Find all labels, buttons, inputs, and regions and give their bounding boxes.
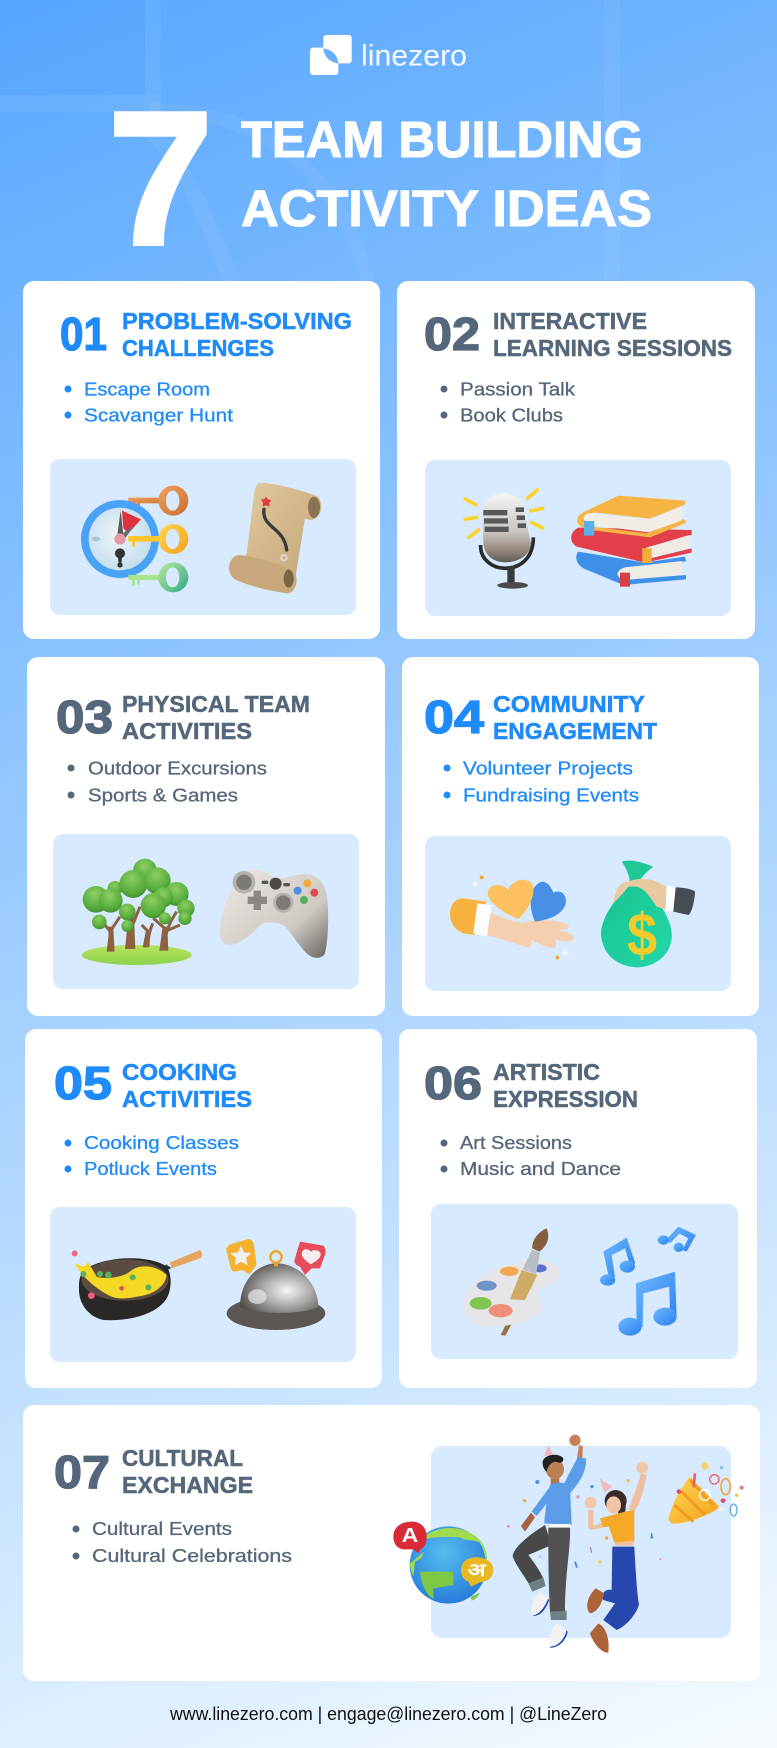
image panel 07 xyxy=(431,1446,731,1638)
image panel 05 xyxy=(50,1207,356,1362)
panel: card 07 cultural exchange xyxy=(23,1405,760,1681)
image panel 06 xyxy=(431,1204,738,1359)
heading 06: EXPRESSION xyxy=(493,1086,638,1112)
list 03: Outdoor Excursions xyxy=(88,758,267,778)
number 03: 03 xyxy=(56,691,113,743)
list 04 xyxy=(444,758,639,806)
list 04: Fundraising Events xyxy=(463,784,639,806)
icon: serving cloche xyxy=(226,1239,326,1330)
heading 01: CHALLENGES xyxy=(122,335,274,361)
title line 1: TEAM BUILDING xyxy=(241,111,643,168)
number 05: 05 xyxy=(54,1057,112,1109)
icon: microphone xyxy=(465,490,543,589)
heading 02 xyxy=(493,308,732,361)
panel: card 05 cooking activities xyxy=(25,1029,382,1388)
heading 05: ACTIVITIES xyxy=(122,1086,252,1112)
heading 05: COOKING xyxy=(122,1059,237,1085)
icon: clock with keys xyxy=(81,486,188,592)
heading 04: ENGAGEMENT xyxy=(493,718,658,744)
list 03 xyxy=(68,758,267,806)
list 04: Volunteer Projects xyxy=(463,758,633,778)
panel: card 03 physical team activities xyxy=(27,657,385,1016)
title line 2: ACTIVITY IDEAS xyxy=(241,180,652,237)
number 06: 06 xyxy=(424,1057,482,1109)
heading 03: ACTIVITIES xyxy=(122,718,252,744)
heading 06: ARTISTIC xyxy=(493,1059,600,1085)
icon: hand with hearts xyxy=(450,875,574,960)
list 01 xyxy=(64,378,233,426)
heading 06 xyxy=(493,1059,638,1112)
wordmark: linezero xyxy=(361,40,467,72)
icon: globe with speech bubbles xyxy=(393,1522,493,1604)
icon: book stack xyxy=(571,496,692,587)
list 07: Cultural Celebrations xyxy=(92,1545,292,1566)
icon: jumping man xyxy=(513,1435,586,1648)
icon: globe with speech bubbles: अ xyxy=(468,1560,487,1580)
list 02 xyxy=(440,378,576,426)
image panel 03 xyxy=(53,834,359,989)
heading 02: INTERACTIVE xyxy=(493,308,647,334)
list 07: Cultural Events xyxy=(92,1518,232,1539)
icon: jumping woman xyxy=(585,1462,648,1653)
panel: card 02 interactive learning sessions xyxy=(397,281,755,639)
image panel 01 xyxy=(50,459,356,615)
heading 07: EXCHANGE xyxy=(122,1472,253,1498)
image panel 04 xyxy=(425,836,731,991)
list 05: Cooking Classes xyxy=(84,1132,239,1153)
panel: card 01 problem-solving challenges xyxy=(23,281,380,639)
heading 01: PROBLEM-SOLVING xyxy=(122,308,352,334)
number 02: 02 xyxy=(424,308,480,360)
number 01: 01 xyxy=(60,308,107,360)
panel: card 04 community engagement xyxy=(402,657,759,1016)
list 03: Sports & Games xyxy=(88,784,238,806)
icon: paint palette and brush xyxy=(464,1228,560,1336)
icon: trees xyxy=(82,859,195,965)
heading 03 xyxy=(122,691,310,744)
icon: game controller xyxy=(220,870,328,958)
heading 02: LEARNING SESSIONS xyxy=(493,335,732,361)
list 06: Art Sessions xyxy=(460,1132,572,1153)
list 07 xyxy=(72,1518,292,1566)
icon: party popper xyxy=(668,1462,744,1524)
list 02: Book Clubs xyxy=(460,404,563,426)
heading 01 xyxy=(122,308,352,361)
icon: money bag with hand xyxy=(601,861,695,968)
list 06 xyxy=(440,1132,621,1179)
heading 07 xyxy=(122,1445,253,1498)
icon: music notes xyxy=(600,1227,696,1336)
icon: scroll map xyxy=(229,483,321,593)
list 05 xyxy=(64,1132,239,1179)
footer contact line: www.linezero.com | engage@linezero.com | @LineZero xyxy=(169,1704,607,1724)
title xyxy=(108,73,652,285)
big seven: 7 xyxy=(108,73,213,285)
heading 05 xyxy=(122,1059,252,1112)
icon: money bag with hand: $ xyxy=(627,901,657,968)
list 02: Passion Talk xyxy=(460,378,576,400)
list 06: Music and Dance xyxy=(460,1158,621,1179)
icon: globe with speech bubbles: A xyxy=(402,1524,418,1547)
panel: card 06 artistic expression xyxy=(399,1029,757,1388)
heading 04: COMMUNITY xyxy=(493,691,645,717)
heading 04 xyxy=(493,691,658,744)
icon: confetti xyxy=(507,1479,661,1568)
number 04: 04 xyxy=(424,691,484,743)
logo xyxy=(310,35,467,75)
list 01: Scavanger Hunt xyxy=(84,404,233,426)
icon: frying pan xyxy=(72,1250,202,1320)
heading 03: PHYSICAL TEAM xyxy=(122,691,310,717)
image panel 02 xyxy=(425,460,731,616)
heading 07: CULTURAL xyxy=(122,1445,243,1471)
list 05: Potluck Events xyxy=(84,1158,217,1179)
list 01: Escape Room xyxy=(84,378,210,400)
number 07: 07 xyxy=(54,1446,110,1498)
icon: linezero mark xyxy=(310,35,352,75)
